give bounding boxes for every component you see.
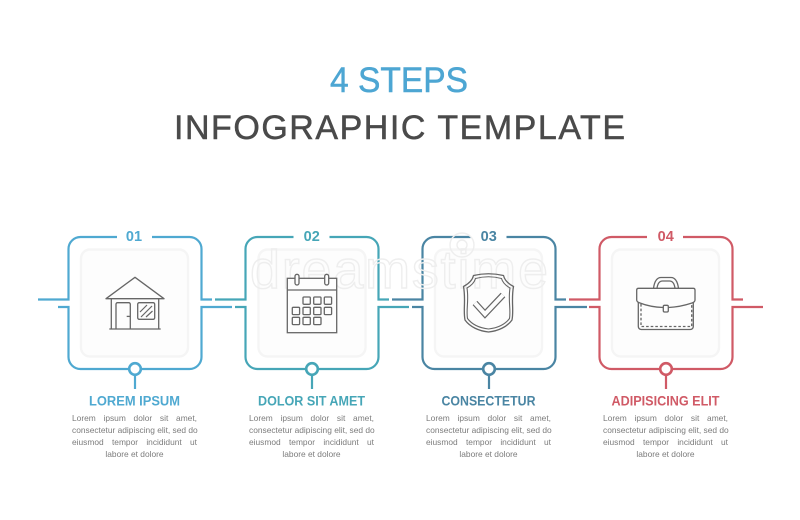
step 3 outline frame	[392, 237, 587, 369]
step 1 panel	[38, 229, 232, 408]
step 2 body text	[249, 413, 375, 459]
step 1 body text: consectetur adipiscing elit, sed do	[72, 425, 198, 435]
step 1 inner card	[81, 250, 188, 356]
step 1 marker	[129, 363, 141, 389]
step 2 number: 02	[304, 229, 320, 245]
step 3 body text	[426, 413, 552, 459]
icon: briefcase	[637, 278, 695, 330]
step 4 body text	[603, 413, 729, 459]
step 4 body text: Lorem ipsum dolor sit amet,	[603, 413, 728, 423]
icon: shield with check	[464, 274, 514, 332]
step 4 body text: labore et dolore	[636, 449, 695, 459]
step 1 body text: eiusmod tempor incididunt ut	[72, 437, 197, 447]
step 3 body text: labore et dolore	[459, 449, 518, 459]
step 3 body text: consectetur adipiscing elit, sed do	[426, 425, 552, 435]
step 2 panel	[215, 229, 409, 408]
step 4 heading: ADIPISICING ELIT	[612, 394, 720, 408]
step 1 body text: Lorem ipsum dolor sit amet,	[72, 413, 197, 423]
step 1 number: 01	[126, 229, 142, 245]
step 3 heading: CONSECTETUR	[442, 394, 536, 408]
icon: calendar	[287, 274, 337, 333]
title: 4 steps: 4 STEPS	[330, 60, 468, 100]
step 4 panel	[569, 229, 763, 408]
step 4 body text: eiusmod tempor incididunt ut	[603, 437, 728, 447]
step 3 body text: eiusmod tempor incididunt ut	[426, 437, 551, 447]
icon: house	[106, 277, 164, 329]
step 2 outline frame	[215, 237, 409, 369]
step 4 outline frame	[569, 237, 763, 369]
step 2 body text: eiusmod tempor incididunt ut	[249, 437, 374, 447]
title: infographic template: INFOGRAPHIC TEMPLATE	[174, 109, 625, 147]
step 2 inner card	[258, 250, 366, 356]
step 4 number: 04	[658, 229, 674, 245]
watermark: dreamstime	[250, 240, 548, 300]
step 1 outline frame	[38, 237, 232, 369]
step 1 body text: labore et dolore	[105, 449, 164, 459]
step 3 number: 03	[481, 229, 497, 245]
step 2 marker	[306, 363, 318, 389]
step 2 body text: labore et dolore	[282, 449, 341, 459]
step 3 body text: Lorem ipsum dolor sit amet,	[426, 413, 551, 423]
step 4 marker	[660, 363, 672, 389]
step 3 inner card	[435, 250, 542, 356]
step 2 body text: consectetur adipiscing elit, sed do	[249, 425, 375, 435]
step 4 body text: consectetur adipiscing elit, sed do	[603, 425, 729, 435]
step 1 heading: LOREM IPSUM	[89, 394, 180, 408]
step 3 panel	[392, 229, 587, 408]
step 2 heading: DOLOR SIT AMET	[258, 394, 366, 408]
step 2 body text: Lorem ipsum dolor sit amet,	[249, 413, 374, 423]
step 4 inner card	[612, 250, 719, 356]
step 3 marker	[483, 363, 495, 389]
step 1 body text	[72, 413, 198, 459]
